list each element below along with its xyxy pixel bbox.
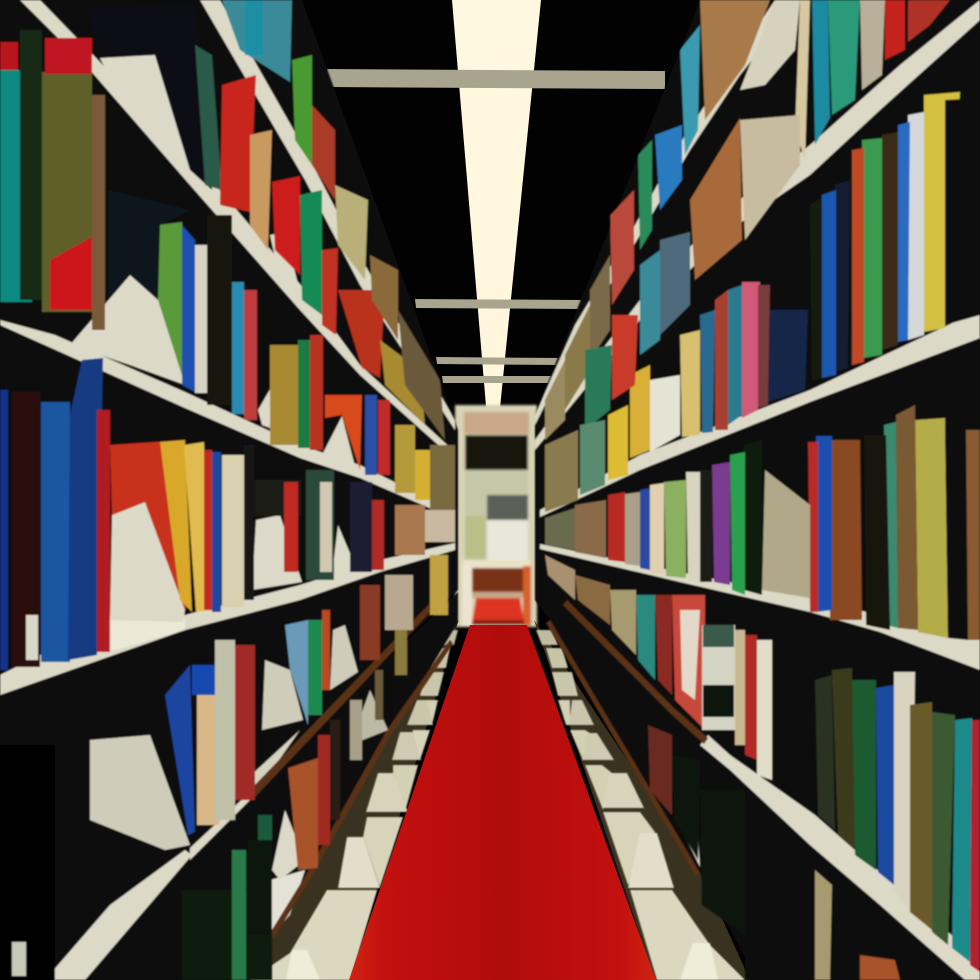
red carpet bbox=[349, 625, 656, 980]
right books tier 3 bbox=[545, 405, 980, 640]
left books tier 2 bbox=[108, 190, 455, 510]
right books tier 4 bbox=[545, 555, 980, 972]
left floor steps and bookends bbox=[250, 630, 458, 980]
left books tier 5 bbox=[0, 745, 272, 980]
ceiling beams bbox=[327, 69, 665, 383]
right shelf boards bbox=[535, 0, 980, 980]
left wood shelf edges bbox=[250, 600, 453, 938]
floor bbox=[250, 620, 750, 980]
right floor steps and bookends bbox=[536, 630, 745, 980]
far end of aisle bbox=[455, 405, 537, 627]
right wood shelf edges bbox=[546, 600, 708, 876]
left books tier 3 bbox=[0, 358, 455, 670]
left books tier 4 bbox=[165, 555, 448, 870]
ceiling light strip bbox=[452, 0, 541, 418]
left bookends bbox=[70, 55, 388, 880]
left shelving bbox=[0, 0, 458, 980]
left shelf boards bbox=[0, 0, 455, 980]
right books tier 2 bbox=[545, 92, 980, 512]
right books tier 1 bbox=[545, 0, 950, 440]
right shelving bbox=[535, 0, 980, 980]
right books tier 5 bbox=[648, 725, 900, 980]
left books tier 1 bbox=[0, 0, 445, 440]
